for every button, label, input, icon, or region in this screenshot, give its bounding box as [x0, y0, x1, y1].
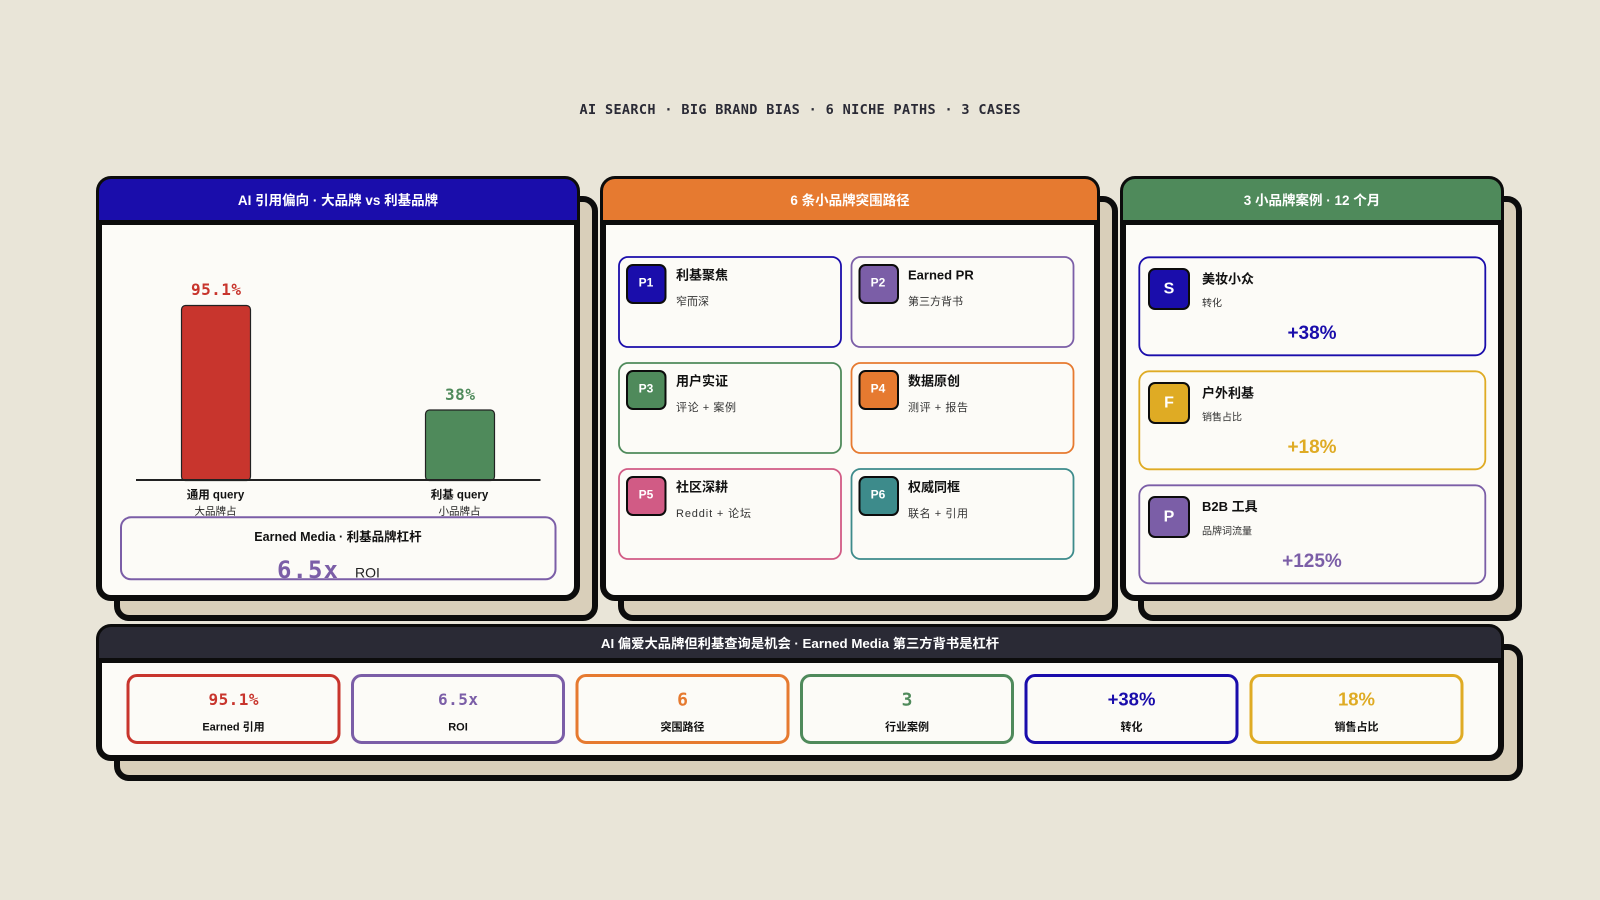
callout: earned media ROI: Earned Media · 利基品牌杠杆	[254, 529, 422, 544]
panel: citation bias	[99, 179, 595, 618]
card P1: 窄而深	[676, 294, 709, 308]
stat 18%: 18%	[1338, 688, 1375, 710]
card P4: 数据原创	[908, 374, 960, 388]
card P6: P6	[871, 488, 886, 502]
callout: earned media ROI: 6.5x	[277, 556, 338, 584]
stat 6.5x: 6.5x	[438, 690, 478, 709]
card P6: 联名 + 引用	[908, 506, 968, 520]
case: beauty: S	[1164, 280, 1175, 298]
card P2: Earned PR	[908, 268, 974, 282]
case: outdoor: 户外利基	[1202, 386, 1254, 400]
bar chart: 95.1%	[191, 280, 241, 299]
panel: three cases	[1123, 179, 1519, 618]
card P4: P4	[871, 382, 886, 396]
case: outdoor	[1139, 371, 1485, 469]
stat 6: 突围路径	[660, 720, 704, 734]
case: outdoor: F	[1164, 394, 1174, 412]
card P2: 第三方背书	[908, 294, 963, 308]
stat 6.5x	[352, 676, 564, 742]
card P3	[619, 363, 841, 453]
case: outdoor: 销售占比	[1202, 410, 1242, 424]
case: beauty: 转化	[1202, 296, 1222, 310]
card P6: 权威同框	[908, 480, 960, 494]
heading: six paths: 6 条小品牌突围路径	[790, 192, 910, 208]
bar chart: 利基 query	[431, 488, 489, 502]
panel: six paths	[603, 179, 1115, 618]
bar chart: 大品牌占	[194, 504, 236, 518]
stat 3: 行业案例	[885, 720, 929, 734]
card P5: 社区深耕	[676, 480, 728, 494]
case: beauty	[1139, 257, 1485, 355]
card P5: Reddit + 论坛	[676, 506, 751, 520]
stat 95.1%	[128, 676, 339, 742]
stat 95.1%: 95.1%	[208, 690, 259, 709]
callout: earned media ROI: ROI	[355, 564, 380, 580]
bar chart	[136, 280, 540, 518]
card P2	[852, 257, 1074, 347]
stat 3: 3	[902, 690, 912, 710]
card P3: 评论 + 案例	[676, 400, 736, 414]
card P3: 用户实证	[676, 374, 728, 388]
panel: summary strip	[99, 627, 1520, 778]
heading: citation bias: AI 引用偏向 · 大品牌 vs 利基品牌	[238, 192, 438, 208]
stat 18%	[1251, 676, 1462, 742]
card P1: P1	[639, 276, 654, 290]
case: outdoor: +18%	[1287, 437, 1337, 458]
case: b2b: +125%	[1282, 551, 1342, 572]
heading: takeaway: AI 偏爱大品牌但利基查询是机会 · Earned Media 第三方背书是杠杆	[601, 635, 999, 651]
case: b2b	[1139, 485, 1485, 583]
case: b2b: 品牌词流量	[1202, 524, 1252, 538]
bar chart: 38%	[445, 385, 475, 404]
card P5: P5	[639, 488, 654, 502]
stat 6	[577, 676, 788, 742]
stat 18%: 销售占比	[1334, 720, 1378, 734]
stat 6.5x: ROI	[448, 722, 468, 734]
title: AI SEARCH · BIG BRAND BIAS · 6 NICHE PATHS · 3 CASES	[580, 102, 1020, 118]
case: b2b: P	[1164, 508, 1175, 526]
case: beauty: +38%	[1287, 323, 1337, 344]
callout: earned media ROI	[121, 517, 556, 584]
stat +38%	[1026, 676, 1237, 742]
case: b2b: B2B 工具	[1202, 499, 1258, 514]
card P4	[852, 363, 1074, 453]
card P4: 测评 + 报告	[908, 400, 968, 414]
card P5	[619, 469, 841, 559]
stat +38%: +38%	[1108, 688, 1155, 710]
heading: three cases: 3 小品牌案例 · 12 个月	[1244, 192, 1380, 208]
card P1	[619, 257, 841, 347]
case: beauty: 美妆小众	[1202, 272, 1254, 286]
card P1: 利基聚焦	[676, 268, 728, 282]
bar chart: 小品牌占	[438, 504, 480, 518]
card P2: P2	[871, 276, 886, 290]
bar chart: 通用 query	[187, 488, 245, 502]
stat 95.1%: Earned 引用	[202, 720, 265, 734]
card P3: P3	[639, 382, 654, 396]
stat 6: 6	[677, 690, 688, 710]
stat +38%: 转化	[1120, 720, 1142, 734]
card P6	[852, 469, 1074, 559]
stat 3	[802, 676, 1012, 742]
